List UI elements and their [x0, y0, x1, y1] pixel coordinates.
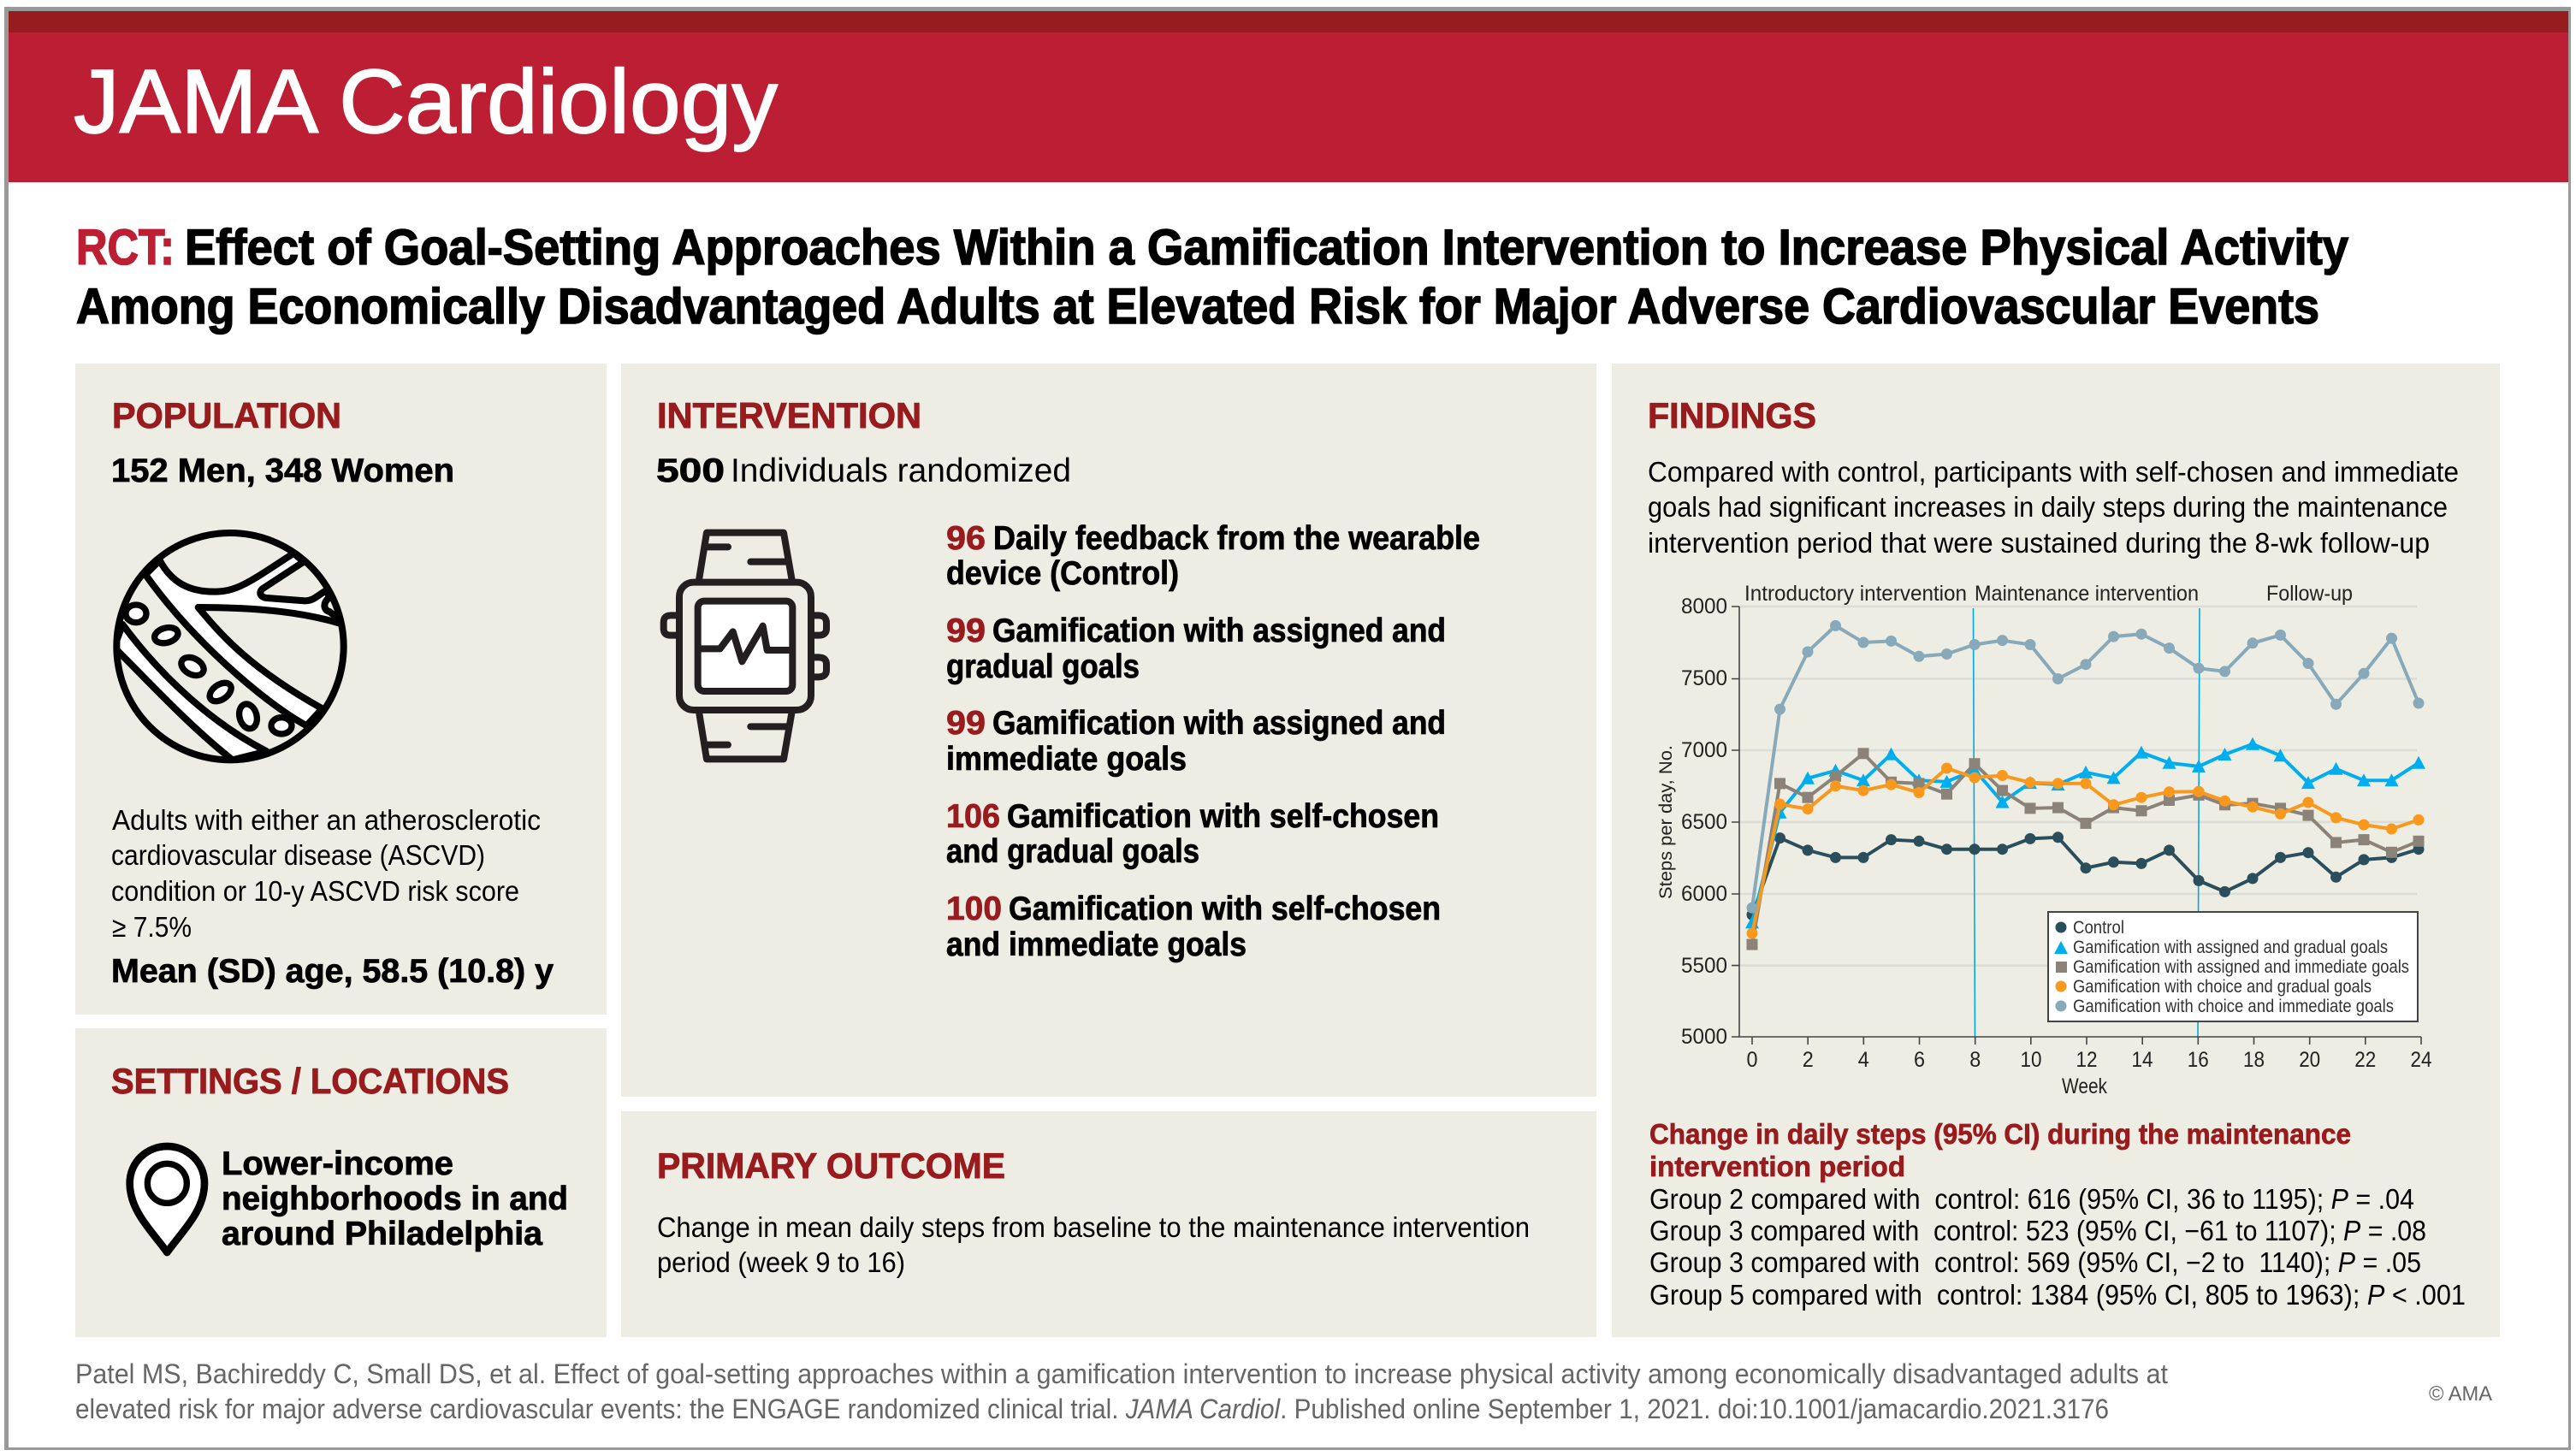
results list: Group 5 compared with control: 1384 (95% CI, 805 to 1963); P < .001 — [1649, 1279, 2466, 1311]
intervention arm: assigned gradual: 99 — [946, 613, 986, 649]
panel: intervention — [621, 364, 1596, 1097]
intervention arm: control: device (Control) — [946, 555, 1179, 592]
period dividers — [1973, 608, 2200, 1037]
heading: primary outcome: PRIMARY OUTCOME — [657, 1145, 1005, 1186]
location text: around Philadelphia — [222, 1216, 542, 1252]
x-axis tick labels: 4 — [1858, 1048, 1869, 1072]
findings summary: Compared with control, participants with self-chosen and immediate — [1648, 456, 2459, 488]
results heading: Change in daily steps (95% CI) during the maintenance — [1649, 1118, 2351, 1150]
randomized count: Individuals randomized — [731, 453, 1071, 489]
chart legend: Gamification with choice and gradual goals — [2073, 977, 2372, 997]
intervention arm: assigned immediate — [946, 705, 1446, 778]
icon: blood vessel — [114, 533, 344, 760]
axes — [1732, 607, 2421, 1045]
findings summary — [1648, 456, 2459, 559]
x-axis tick labels: 18 — [2243, 1048, 2265, 1072]
results heading — [1649, 1118, 2351, 1182]
intervention arm: assigned gradual — [946, 613, 1446, 685]
results list — [1649, 1183, 2466, 1311]
heading: intervention: INTERVENTION — [657, 395, 921, 435]
intervention arm: assigned immediate: Gamification with assigned and — [992, 705, 1446, 742]
population description: Adults with either an atherosclerotic — [112, 804, 541, 836]
primary outcome text: Change in mean daily steps from baseline to the maintenance intervention — [657, 1211, 1530, 1243]
icon: smartwatch — [664, 533, 826, 759]
chart legend: Gamification with assigned and immediate goals — [2073, 957, 2409, 977]
intervention arm: control: 96 — [946, 520, 986, 557]
population description: ≥ 7.5% — [112, 911, 192, 943]
intervention arm: assigned gradual: Gamification with assigned and — [992, 613, 1446, 649]
series: assigned and immediate goals — [1752, 754, 2419, 944]
period labels: Follow-up — [2266, 582, 2353, 606]
chart gridlines — [1739, 607, 2417, 966]
panel: findings — [1612, 364, 2500, 1337]
title: RCT: — [76, 220, 175, 275]
title — [76, 220, 2348, 334]
intervention arm: self-chosen gradual: Gamification with self-chosen — [1007, 798, 1439, 835]
y-axis tick labels: 6000 — [1681, 882, 1727, 906]
findings summary: goals had significant increases in daily steps during the maintenance — [1648, 491, 2448, 523]
y-axis tick labels: 7500 — [1681, 666, 1727, 690]
series: choice and gradual goals — [1752, 768, 2419, 933]
intervention arm: self-chosen gradual: and gradual goals — [946, 833, 1199, 870]
intervention arm: self-chosen gradual — [946, 798, 1439, 870]
population description — [111, 804, 541, 943]
intervention arm: self-chosen immediate: and immediate goals — [946, 926, 1247, 963]
journal name: JAMA Cardiology — [74, 51, 778, 152]
period labels: Maintenance intervention — [1975, 582, 2199, 606]
y-axis tick labels: 5500 — [1681, 954, 1727, 978]
series: choice and immediate goals — [1752, 625, 2419, 908]
x-axis tick labels: 2 — [1803, 1048, 1814, 1072]
chart legend: Gamification with choice and immediate goals — [2073, 997, 2394, 1016]
location text — [222, 1145, 568, 1252]
citation — [75, 1358, 2168, 1424]
y-axis title: Steps per day, No. — [1656, 745, 1676, 899]
period labels: Introductory intervention — [1744, 582, 1967, 606]
x-axis tick labels — [1747, 1048, 2432, 1072]
chart legend: Control — [2073, 918, 2124, 938]
chart legend — [2048, 912, 2418, 1021]
intervention arm: self-chosen immediate — [946, 891, 1441, 963]
citation: Patel MS, Bachireddy C, Small DS, et al. Effect of goal-setting approaches within a gamification intervention to increase physical activity among economically disadvantaged adults at — [75, 1358, 2168, 1389]
x-axis title: Week — [2062, 1074, 2107, 1098]
intervention arm: control — [946, 520, 1480, 592]
y-axis tick labels: 7000 — [1681, 738, 1727, 762]
x-axis tick labels: 8 — [1969, 1048, 1981, 1072]
location text: Lower-income — [222, 1145, 453, 1182]
intervention arm: self-chosen immediate: 100 — [946, 891, 1002, 927]
intervention arm: self-chosen immediate: Gamification with self-chosen — [1009, 891, 1441, 927]
heading: findings: FINDINGS — [1648, 395, 1816, 435]
results heading: intervention period — [1649, 1151, 1905, 1182]
x-axis tick labels: 6 — [1914, 1048, 1925, 1072]
series: control — [1752, 837, 2419, 914]
y-axis tick labels: 8000 — [1681, 595, 1727, 619]
y-axis tick labels — [1681, 595, 1727, 1049]
heading: population: POPULATION — [112, 395, 341, 435]
population description: cardiovascular disease (ASCVD) — [111, 839, 485, 871]
intervention arm: self-chosen gradual: 106 — [946, 798, 1000, 835]
intervention arm: assigned gradual: gradual goals — [946, 648, 1140, 685]
mean age: Mean (SD) age, 58.5 (10.8) y — [111, 953, 554, 990]
y-axis tick labels: 6500 — [1681, 810, 1727, 834]
population counts: 152 Men, 348 Women — [111, 453, 454, 489]
x-axis tick labels: 10 — [2021, 1048, 2041, 1072]
copyright: © AMA — [2429, 1382, 2492, 1406]
intervention arm: control: Daily feedback from the wearable — [993, 520, 1480, 557]
population description: condition or 10-y ASCVD risk score — [111, 875, 519, 907]
y-axis tick labels: 5000 — [1681, 1025, 1727, 1049]
x-axis tick labels: 12 — [2076, 1048, 2098, 1072]
primary outcome text — [657, 1211, 1530, 1278]
title: Among Economically Disadvantaged Adults at Elevated Risk for Major Adverse Cardiovascular Events — [76, 279, 2319, 334]
results list: Group 3 compared with control: 569 (95% CI, −2 to 1140); P = .05 — [1649, 1246, 2421, 1278]
x-axis tick labels: 16 — [2188, 1048, 2209, 1072]
results list: Group 2 compared with control: 616 (95% CI, 36 to 1195); P = .04 — [1649, 1183, 2414, 1215]
x-axis tick labels: 0 — [1747, 1048, 1757, 1072]
icon: map pin — [130, 1146, 204, 1252]
panel: settings / locations — [75, 1028, 607, 1337]
chart legend: Gamification with assigned and gradual goals — [2073, 938, 2388, 957]
intervention arm: assigned immediate: 99 — [946, 705, 986, 742]
line chart: steps per day — [1656, 582, 2432, 1098]
primary outcome text: period (week 9 to 16) — [657, 1246, 905, 1278]
title: Effect of Goal-Setting Approaches Within a Gamification Intervention to Increase Physical Activity — [185, 220, 2348, 275]
period labels — [1744, 582, 2353, 606]
citation: elevated risk for major adverse cardiovascular events: the ENGAGE randomized clinical trial. JAMA Cardiol. Published online September 1, 2021. doi:10.1001/jamacardio.2021.3176 — [75, 1394, 2109, 1424]
x-axis tick labels: 20 — [2299, 1048, 2320, 1072]
randomized count: 500 — [656, 453, 725, 489]
header band — [9, 11, 2568, 182]
intervention arm: assigned immediate: immediate goals — [946, 741, 1187, 778]
heading: settings: SETTINGS / LOCATIONS — [111, 1061, 509, 1101]
panel: population — [75, 364, 607, 1015]
x-axis tick labels: 22 — [2354, 1048, 2376, 1072]
series: assigned and gradual goals — [1752, 744, 2419, 922]
results list: Group 3 compared with control: 523 (95% CI, −61 to 1107); P = .08 — [1649, 1215, 2426, 1246]
findings summary: intervention period that were sustained during the 8-wk follow-up — [1648, 527, 2430, 559]
x-axis tick labels: 14 — [2132, 1048, 2153, 1072]
location text: neighborhoods in and — [222, 1181, 568, 1217]
panel: primary outcome — [621, 1111, 1596, 1337]
x-axis tick labels: 24 — [2411, 1048, 2432, 1072]
